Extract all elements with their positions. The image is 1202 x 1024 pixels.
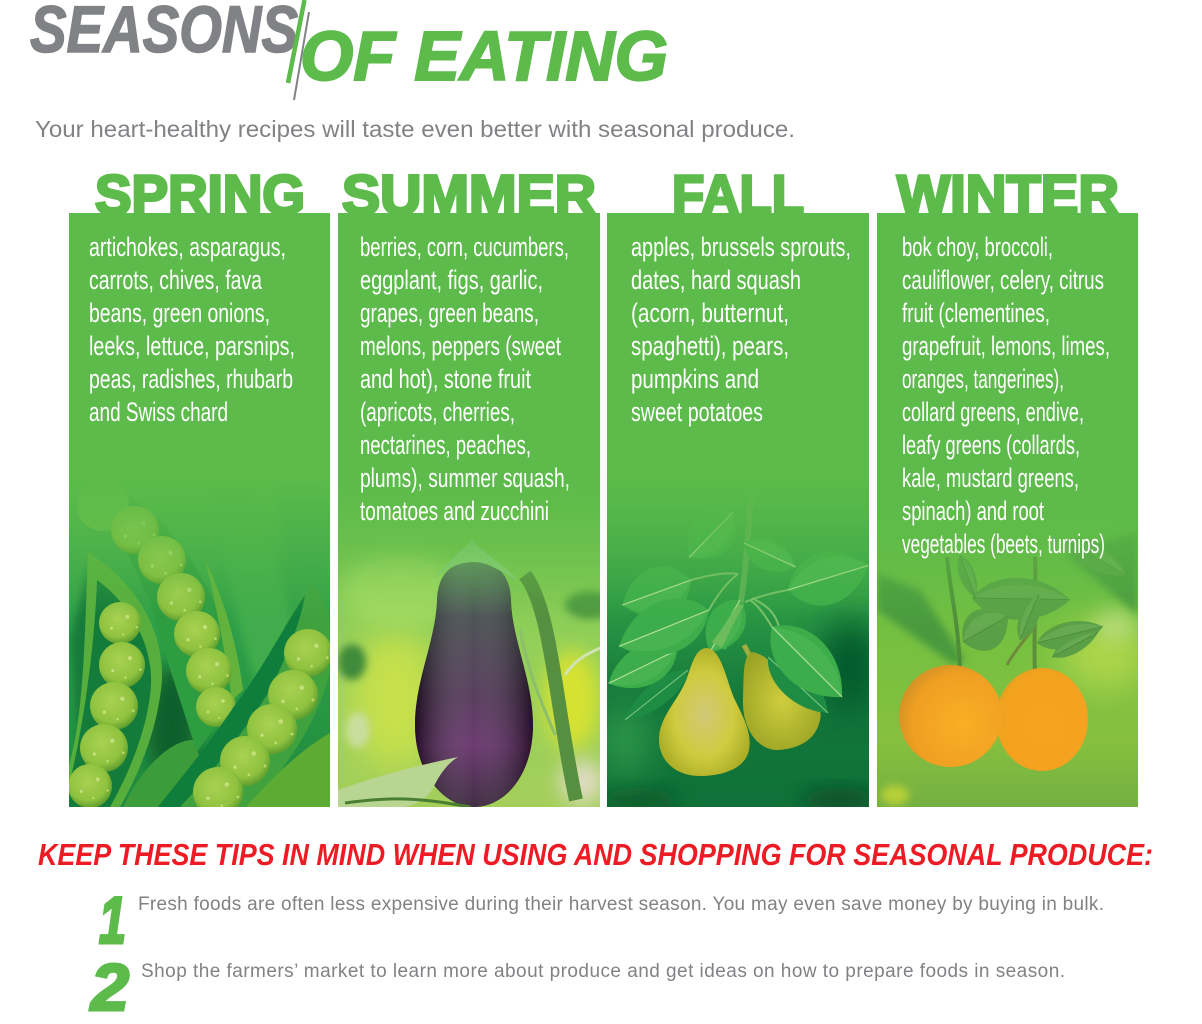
branch and stems	[690, 512, 788, 656]
panel: summer	[338, 163, 615, 807]
ingredient list: summer: nectarines, peaches,	[360, 430, 531, 460]
ingredient list: winter: kale, mustard greens,	[902, 463, 1079, 493]
ingredient list: fall	[631, 232, 851, 427]
ingredient list: fall: (acorn, butternut,	[631, 298, 789, 328]
ingredient list: fall: pumpkins and	[631, 364, 759, 394]
ingredient list: winter: oranges, tangerines),	[902, 364, 1064, 394]
ingredient list: winter: spinach) and root	[902, 496, 1044, 526]
tip number 1: 1	[99, 883, 126, 957]
panel: fall	[600, 163, 880, 812]
ingredient list: winter: bok choy, broccoli,	[902, 232, 1053, 262]
heading: summer: SUMMER	[342, 163, 596, 226]
panel: winter	[877, 163, 1150, 807]
stem and branch	[520, 575, 600, 800]
photo: eggplant	[338, 523, 600, 807]
ingredient list: summer: plums), summer squash,	[360, 463, 570, 493]
title slash: green	[288, 0, 304, 83]
ingredient list: spring: carrots, chives, fava	[89, 265, 263, 295]
ingredient list: fall: spaghetti), pears,	[631, 331, 789, 361]
ingredient list: summer: berries, corn, cucumbers,	[360, 232, 569, 262]
photo: oranges on a branch	[877, 536, 1138, 807]
tip 1	[99, 883, 1104, 957]
leaves	[958, 538, 1125, 658]
title words: of eating: OF EATING	[300, 17, 668, 95]
ingredient list: summer: and hot), stone fruit	[360, 364, 531, 394]
stems	[947, 557, 1036, 672]
ingredient list: fall: dates, hard squash	[631, 265, 801, 295]
heading: winter: WINTER	[897, 163, 1119, 226]
ingredient list: summer: tomatoes and zucchini	[360, 496, 549, 526]
ingredient list: summer: grapes, green beans,	[360, 298, 539, 328]
tip 2	[89, 950, 1065, 1024]
tip text 1: Fresh foods are often less expensive during their harvest season. You may even save money by buying in bulk.	[138, 894, 1104, 915]
photo: peas in pods	[69, 500, 330, 807]
ingredient list: spring: and Swiss chard	[89, 397, 228, 427]
photo: pears on a branch	[607, 510, 869, 807]
panel background: spring	[69, 213, 330, 807]
pod: centre	[77, 479, 243, 752]
title: Seasons of Eating	[30, 0, 668, 100]
pod: left	[68, 552, 162, 808]
ingredient list: summer: eggplant, figs, garlic,	[360, 265, 543, 295]
oranges	[899, 665, 1088, 771]
panel background: fall	[607, 213, 869, 807]
ingredient list: spring: artichokes, asparagus,	[89, 232, 286, 262]
ingredient list: spring	[89, 232, 295, 427]
title slash: grey	[294, 12, 309, 100]
ingredient list: spring: beans, green onions,	[89, 298, 270, 328]
ingredient list: summer: melons, peppers (sweet	[360, 331, 561, 361]
pod: back centre	[123, 740, 205, 807]
ingredient list: spring: peas, radishes, rhubarb	[89, 364, 293, 394]
ingredient list: winter	[902, 232, 1110, 559]
ingredient list: winter: grapefruit, lemons, limes,	[902, 331, 1110, 361]
heading: fall: FALL	[672, 163, 804, 226]
panel background: summer	[338, 213, 600, 807]
subtitle: Your heart-healthy recipes will taste even better with seasonal produce.	[35, 116, 795, 142]
ingredient list: fall: sweet potatoes	[631, 397, 763, 427]
ingredient list: summer: (apricots, cherries,	[360, 397, 515, 427]
ingredient list: winter: leafy greens (collards,	[902, 430, 1080, 460]
leaf: bottom left	[338, 757, 458, 807]
tip number 2: 2	[89, 950, 129, 1024]
pod: right	[158, 585, 332, 817]
ingredient list: winter: collard greens, endive,	[902, 397, 1084, 427]
ingredient list: fall: apples, brussels sprouts,	[631, 232, 851, 262]
panel: spring	[68, 163, 332, 817]
leaves behind pears	[608, 512, 868, 720]
ingredient list: winter: fruit (clementines,	[902, 298, 1050, 328]
pears	[659, 648, 821, 776]
leaves in front of pears	[712, 605, 842, 714]
tip text 2: Shop the farmers’ market to learn more about produce and get ideas on how to prepare foods in season.	[141, 961, 1065, 982]
heading: spring: SPRING	[95, 163, 305, 226]
ingredient list: winter: cauliflower, celery, citrus	[902, 265, 1104, 295]
eggplant	[415, 540, 533, 807]
ingredient list: summer	[360, 232, 570, 526]
panel background: winter	[877, 213, 1138, 807]
ingredient list: spring: leeks, lettuce, parsnips,	[89, 331, 295, 361]
